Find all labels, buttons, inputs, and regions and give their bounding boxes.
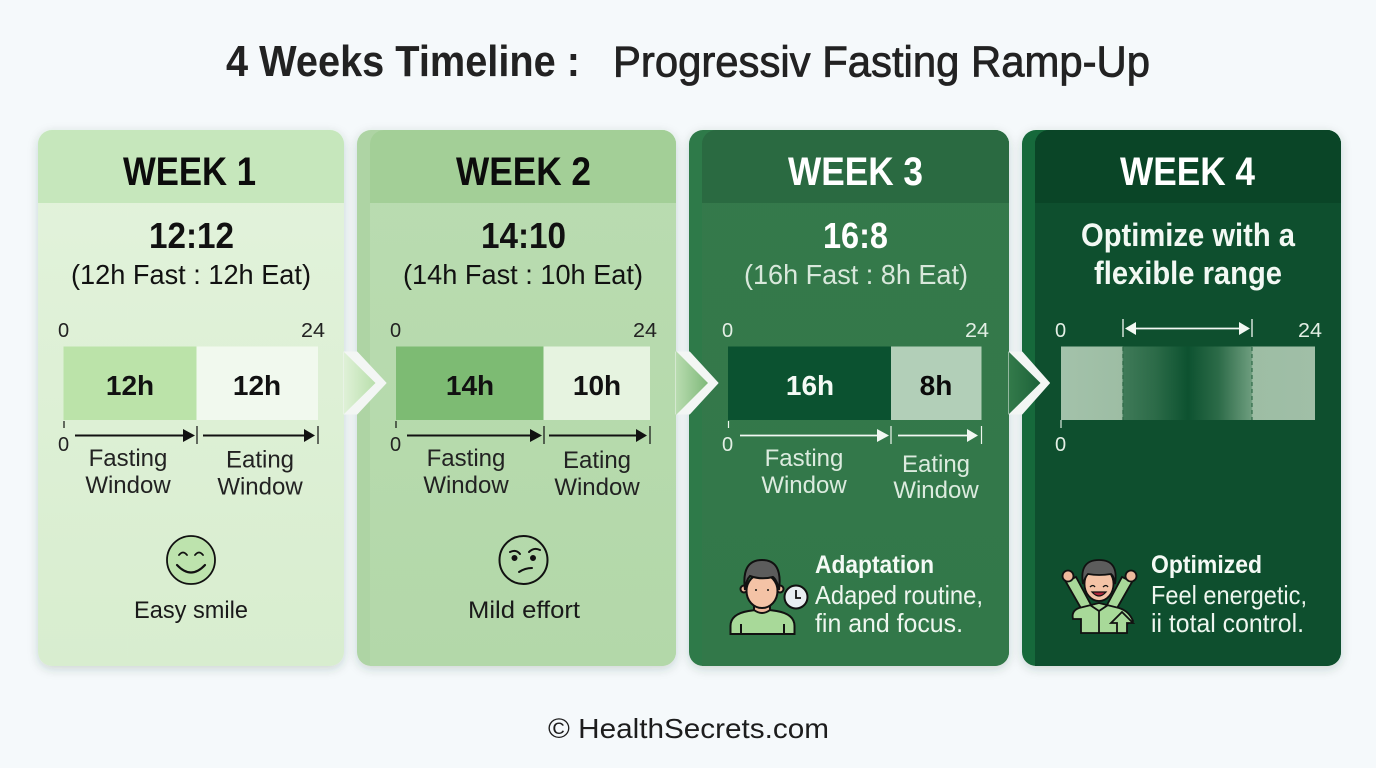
ratio: 12:12 bbox=[71, 215, 311, 290]
text: optimized: Feel energetic, bbox=[1151, 580, 1307, 610]
timeline bar: week 1: 24 bbox=[301, 320, 325, 342]
timeline bar: week 1: 0 bbox=[58, 434, 69, 456]
timeline bar: week 2: 10h bbox=[573, 370, 621, 401]
title: Progressiv Fasting Ramp-Up bbox=[613, 38, 1150, 86]
timeline bar: week 1: Eating bbox=[226, 446, 294, 474]
timeline bar: week 3: 8h bbox=[920, 370, 952, 401]
timeline bar: week 2: Window bbox=[554, 474, 640, 501]
timeline bar: week 2: 14h bbox=[446, 370, 494, 401]
ratio: 14:10: (14h Fast : 10h Eat) bbox=[403, 259, 643, 290]
timeline bar: week 3: Eating bbox=[902, 451, 970, 478]
timeline bar: week 1: Window bbox=[85, 472, 171, 499]
ratio: 14:10 bbox=[403, 215, 643, 290]
ratio: 16:8: (16h Fast : 8h Eat) bbox=[744, 259, 968, 290]
ratio: 12:12: 12:12 bbox=[149, 215, 234, 256]
ratio: 12:12: (12h Fast : 12h Eat) bbox=[71, 259, 311, 290]
timeline bar: week 3: 0 bbox=[722, 320, 733, 342]
timeline bar: week 3: 16h bbox=[786, 370, 834, 401]
timeline bar: week 4: 0 bbox=[1055, 434, 1066, 456]
footer: copyright: © HealthSecrets.com bbox=[548, 713, 829, 744]
timeline bar: week 2 bbox=[390, 320, 657, 501]
timeline bar: week 1: Window bbox=[217, 474, 303, 500]
timeline bar: week 3: 0 bbox=[722, 434, 733, 456]
timeline bar: week 1: 12h bbox=[233, 370, 281, 401]
panel: week 2 bbox=[357, 130, 676, 666]
text: optimized: Optimized bbox=[1151, 551, 1262, 579]
arrow: week 3 to week 4 bbox=[1009, 352, 1050, 414]
text: optimized bbox=[1151, 551, 1307, 638]
arrow: week 2 to week 3 bbox=[676, 351, 718, 415]
timeline bar: week 4 bbox=[1055, 319, 1322, 456]
timeline bar: week 3 bbox=[722, 320, 989, 504]
timeline bar: week 1: 12h bbox=[106, 370, 154, 401]
heading: week 4: WEEK 4 bbox=[1120, 150, 1256, 194]
timeline bar: week 1: Fasting bbox=[89, 445, 167, 472]
ratio: 16:8 bbox=[744, 215, 968, 290]
heading: week 1: WEEK 1 bbox=[123, 150, 256, 194]
arrow: week 1 to week 2 bbox=[344, 352, 386, 414]
timeline bar: week 2: 0 bbox=[390, 434, 401, 456]
title: 4 Weeks Timeline : bbox=[226, 37, 580, 86]
panel: week 3 bbox=[689, 130, 1009, 666]
goal: flexible range: Optimize with a bbox=[1081, 217, 1295, 253]
ratio: 14:10: 14:10 bbox=[481, 215, 566, 256]
caption: easy smile: Easy smile bbox=[134, 597, 248, 624]
goal: flexible range bbox=[1081, 217, 1295, 291]
timeline bar: week 4: 24 bbox=[1298, 320, 1322, 342]
text: adaptation bbox=[815, 551, 983, 638]
text: optimized: ii total control. bbox=[1151, 608, 1304, 638]
timeline bar: week 2: Fasting bbox=[427, 445, 505, 472]
heading: week 3: WEEK 3 bbox=[788, 150, 923, 194]
text: adaptation: Adaped routine, bbox=[815, 580, 983, 610]
ratio: 16:8: 16:8 bbox=[823, 215, 888, 256]
panel: week 1 bbox=[38, 130, 344, 666]
timeline bar: week 2: 0 bbox=[390, 320, 401, 342]
icon: thinking face bbox=[500, 536, 548, 584]
icon: person with clock bbox=[730, 560, 808, 634]
heading: week 2: WEEK 2 bbox=[456, 150, 591, 194]
timeline bar: week 1: 0 bbox=[58, 320, 69, 342]
timeline bar: week 3: Window bbox=[893, 477, 979, 504]
title bbox=[226, 37, 1150, 86]
goal: flexible range: flexible range bbox=[1094, 255, 1282, 291]
caption: mild effort: Mild effort bbox=[468, 597, 580, 624]
timeline bar: week 2: Eating bbox=[563, 447, 631, 474]
timeline bar: week 3: Window bbox=[761, 472, 847, 499]
text: adaptation: fin and focus. bbox=[815, 608, 963, 638]
icon: celebrating person bbox=[1062, 560, 1136, 633]
timeline bar: week 1 bbox=[58, 320, 325, 500]
panel: week 4 bbox=[1022, 130, 1341, 666]
icon: smiling face bbox=[167, 536, 215, 584]
timeline bar: week 3: 24 bbox=[965, 320, 989, 342]
timeline bar: week 3: Fasting bbox=[765, 445, 843, 472]
timeline bar: week 2: Window bbox=[423, 472, 509, 499]
timeline bar: week 2: 24 bbox=[633, 320, 657, 342]
timeline bar: week 4: 0 bbox=[1055, 320, 1066, 342]
text: adaptation: Adaptation bbox=[815, 551, 934, 579]
